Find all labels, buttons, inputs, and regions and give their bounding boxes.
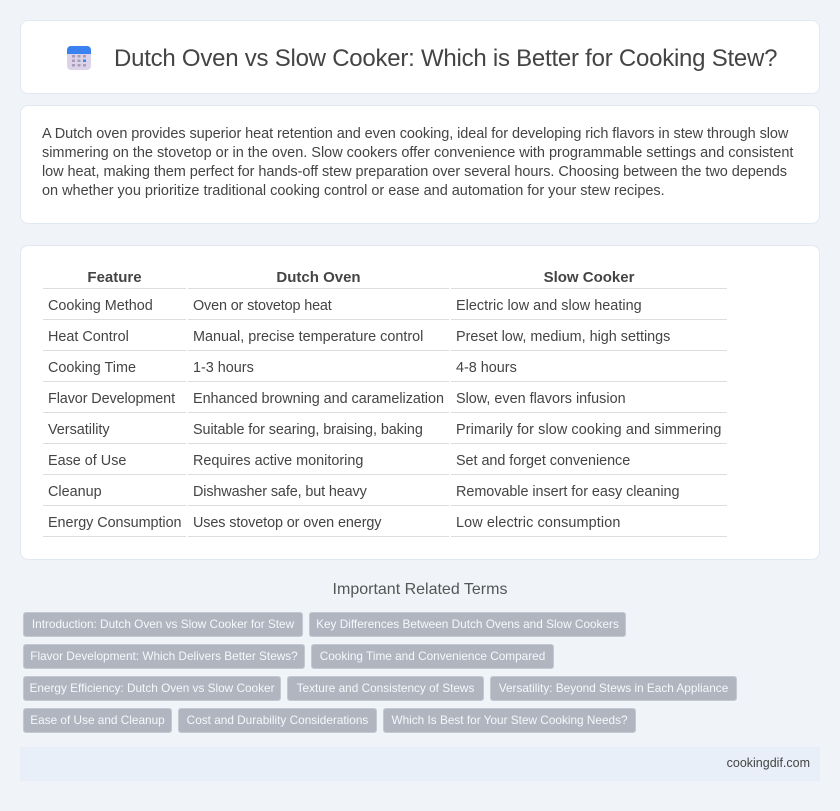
intro text: simmering on the stovetop or in the oven. Slow cookers offer convenience with programmable settings and consistent: [42, 145, 793, 161]
comparison table: Dishwasher safe, but heavy: [193, 484, 367, 500]
comparison table: Cooking Method: [48, 298, 153, 314]
comparison table panel: [20, 245, 820, 560]
related term tags: Introduction: Dutch Oven vs Slow Cooker for Stew: [32, 617, 294, 631]
comparison table: Suitable for searing, braising, baking: [193, 422, 423, 438]
related term tags: Flavor Development: Which Delivers Better Stews?: [30, 649, 298, 663]
related terms heading: Important Related Terms: [333, 581, 507, 598]
intro text: A Dutch oven provides superior heat retention and even cooking, ideal for developing rich flavors in stew through slow: [42, 126, 788, 142]
intro text: on whether you prioritize traditional cooking control or ease and automation for your stew recipes.: [42, 183, 665, 199]
comparison table: Manual, precise temperature control: [193, 329, 423, 345]
related term tags: Cost and Durability Considerations: [187, 713, 368, 727]
related term tags: Which Is Best for Your Stew Cooking Needs?: [391, 713, 628, 727]
title: Dutch Oven vs Slow Cooker: Which is Better for Cooking Stew?: [114, 45, 777, 72]
comparison table: [43, 269, 727, 537]
comparison table: Cooking Time: [48, 360, 136, 376]
comparison table: Slow Cooker: [544, 269, 634, 286]
related term tags: Cooking Time and Convenience Compared: [320, 649, 545, 663]
comparison table: Dutch Oven: [276, 269, 361, 286]
comparison table: Slow, even flavors infusion: [456, 391, 626, 407]
comparison table: Low electric consumption: [456, 515, 620, 531]
comparison table: Electric low and slow heating: [456, 298, 642, 314]
comparison table: 1-3 hours: [193, 360, 254, 376]
footer source: cookingdif.com: [727, 756, 810, 770]
comparison table: Feature: [87, 269, 142, 286]
related term tags: Versatility: Beyond Stews in Each Appliance: [499, 681, 728, 695]
related term tags: Key Differences Between Dutch Ovens and Slow Cookers: [316, 617, 619, 631]
comparison table: Requires active monitoring: [193, 453, 363, 469]
comparison table: Ease of Use: [48, 453, 126, 469]
comparison table: Versatility: [48, 422, 110, 438]
related term tags: Ease of Use and Cleanup: [30, 713, 165, 727]
comparison table: Enhanced browning and caramelization: [193, 391, 444, 407]
comparison table: Preset low, medium, high settings: [456, 329, 670, 345]
comparison table: Oven or stovetop heat: [193, 298, 332, 314]
title card: [20, 20, 820, 94]
comparison table: Primarily for slow cooking and simmering: [456, 422, 722, 438]
comparison table: Removable insert for easy cleaning: [456, 484, 679, 500]
intro panel: [20, 105, 820, 224]
related term tags: [23, 612, 737, 733]
footer bar: [20, 747, 820, 781]
icon: calendar: [67, 46, 91, 70]
comparison table: Cleanup: [48, 484, 102, 500]
comparison table: Uses stovetop or oven energy: [193, 515, 381, 531]
comparison table: Flavor Development: [48, 391, 175, 407]
intro text: [42, 126, 794, 199]
intro text: low heat, making them perfect for hands-off stew preparation over several hours. Choosing between the two depends: [42, 164, 787, 180]
comparison table: Heat Control: [48, 329, 129, 345]
related term tags: Texture and Consistency of Stews: [297, 681, 474, 695]
comparison table: 4-8 hours: [456, 360, 517, 376]
comparison table: Energy Consumption: [48, 515, 182, 531]
comparison table: Set and forget convenience: [456, 453, 630, 469]
related term tags: Energy Efficiency: Dutch Oven vs Slow Cooker: [30, 681, 274, 695]
